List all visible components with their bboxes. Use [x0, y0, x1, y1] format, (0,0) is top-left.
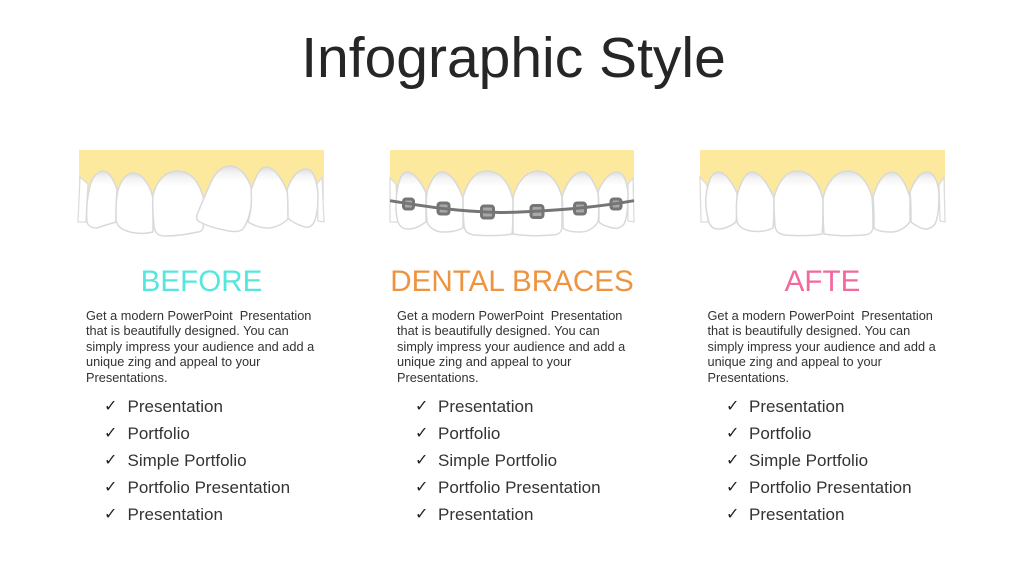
- panel: dental braces: [390, 265, 634, 524]
- illustration: teeth after: [700, 150, 945, 236]
- brackets: [404, 199, 621, 218]
- check marks: dental braces: ✓ ✓ ✓ ✓ ✓: [415, 396, 428, 523]
- text block: before: Get a modern PowerPoint Presentation that is beautifully designed. You can simply impress your audience and add a unique zing and appeal to your Presentations.: [86, 308, 314, 385]
- list: dental braces: Presentation Portfolio Simple Portfolio Portfolio Presentation Presentation: [438, 397, 601, 524]
- illustration: teeth with braces: [390, 150, 634, 236]
- wire: [390, 201, 634, 212]
- list: before: Presentation Portfolio Simple Portfolio Portfolio Presentation Presentation: [128, 397, 290, 524]
- list: after: Presentation Portfolio Simple Portfolio Portfolio Presentation Presentation: [749, 397, 912, 524]
- text block: after: Get a modern PowerPoint Presentation that is beautifully designed. You can simply impress your audience and add a unique zing and appeal to your Presentations.: [708, 308, 936, 385]
- illustration: teeth before: [78, 150, 324, 236]
- check marks: after: ✓ ✓ ✓ ✓ ✓: [726, 396, 739, 523]
- title: Infographic Style: [301, 26, 726, 90]
- panel: after: [708, 265, 936, 524]
- panel: before: [86, 265, 314, 524]
- heading: before: BEFORE: [141, 265, 262, 298]
- check marks: before: ✓ ✓ ✓ ✓ ✓: [104, 396, 117, 523]
- heading: dental braces: DENTAL BRACES: [390, 265, 634, 298]
- heading: after: AFTE: [785, 265, 860, 298]
- text block: dental braces: Get a modern PowerPoint Presentation that is beautifully designed. You can simply impress your audience and add a unique zing and appeal to your Presentations.: [397, 308, 625, 385]
